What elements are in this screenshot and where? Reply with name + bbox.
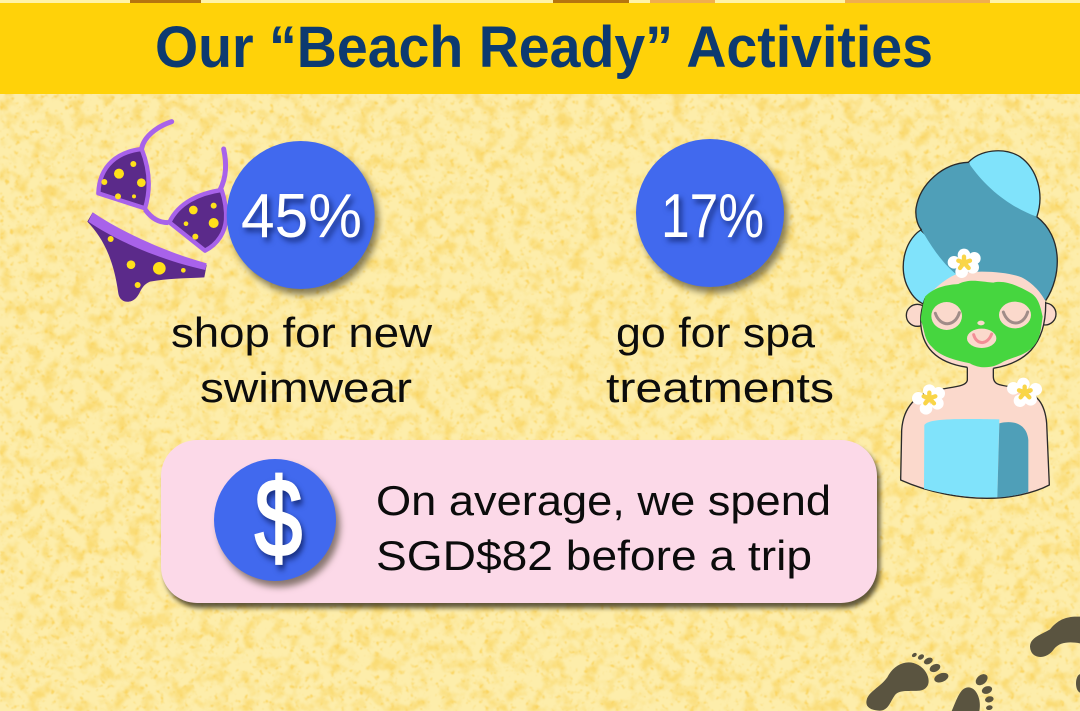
label: shop for new swimwear: shop for new	[171, 309, 433, 356]
label: shop for new swimwear: swimwear	[200, 364, 412, 411]
stat: 45%: 45%	[241, 182, 362, 251]
panel: average spend	[161, 440, 877, 603]
title: Our “Beach Ready” Activities	[155, 15, 933, 80]
icon: dollar coin	[214, 456, 336, 581]
stat: 45%	[227, 141, 375, 289]
stat: 17%: 17%	[661, 182, 764, 251]
banner	[0, 3, 1080, 94]
label: go for spa treatments: treatments	[606, 364, 834, 411]
icon: bikini	[87, 122, 226, 302]
icon: dollar coin: $	[255, 456, 302, 579]
callout text: SGD$82 before a trip	[376, 532, 812, 579]
callout box	[161, 440, 877, 603]
footprints	[866, 617, 1080, 711]
top strip remnants	[0, 0, 1080, 3]
callout text: On average, we spend	[376, 477, 831, 524]
label: go for spa treatments: go for spa	[616, 309, 816, 356]
label: shop for new swimwear	[171, 309, 433, 411]
illustration: woman with face mask	[901, 151, 1057, 498]
stat: 17%	[636, 139, 784, 287]
callout text	[376, 477, 831, 579]
label: go for spa treatments	[606, 309, 834, 411]
